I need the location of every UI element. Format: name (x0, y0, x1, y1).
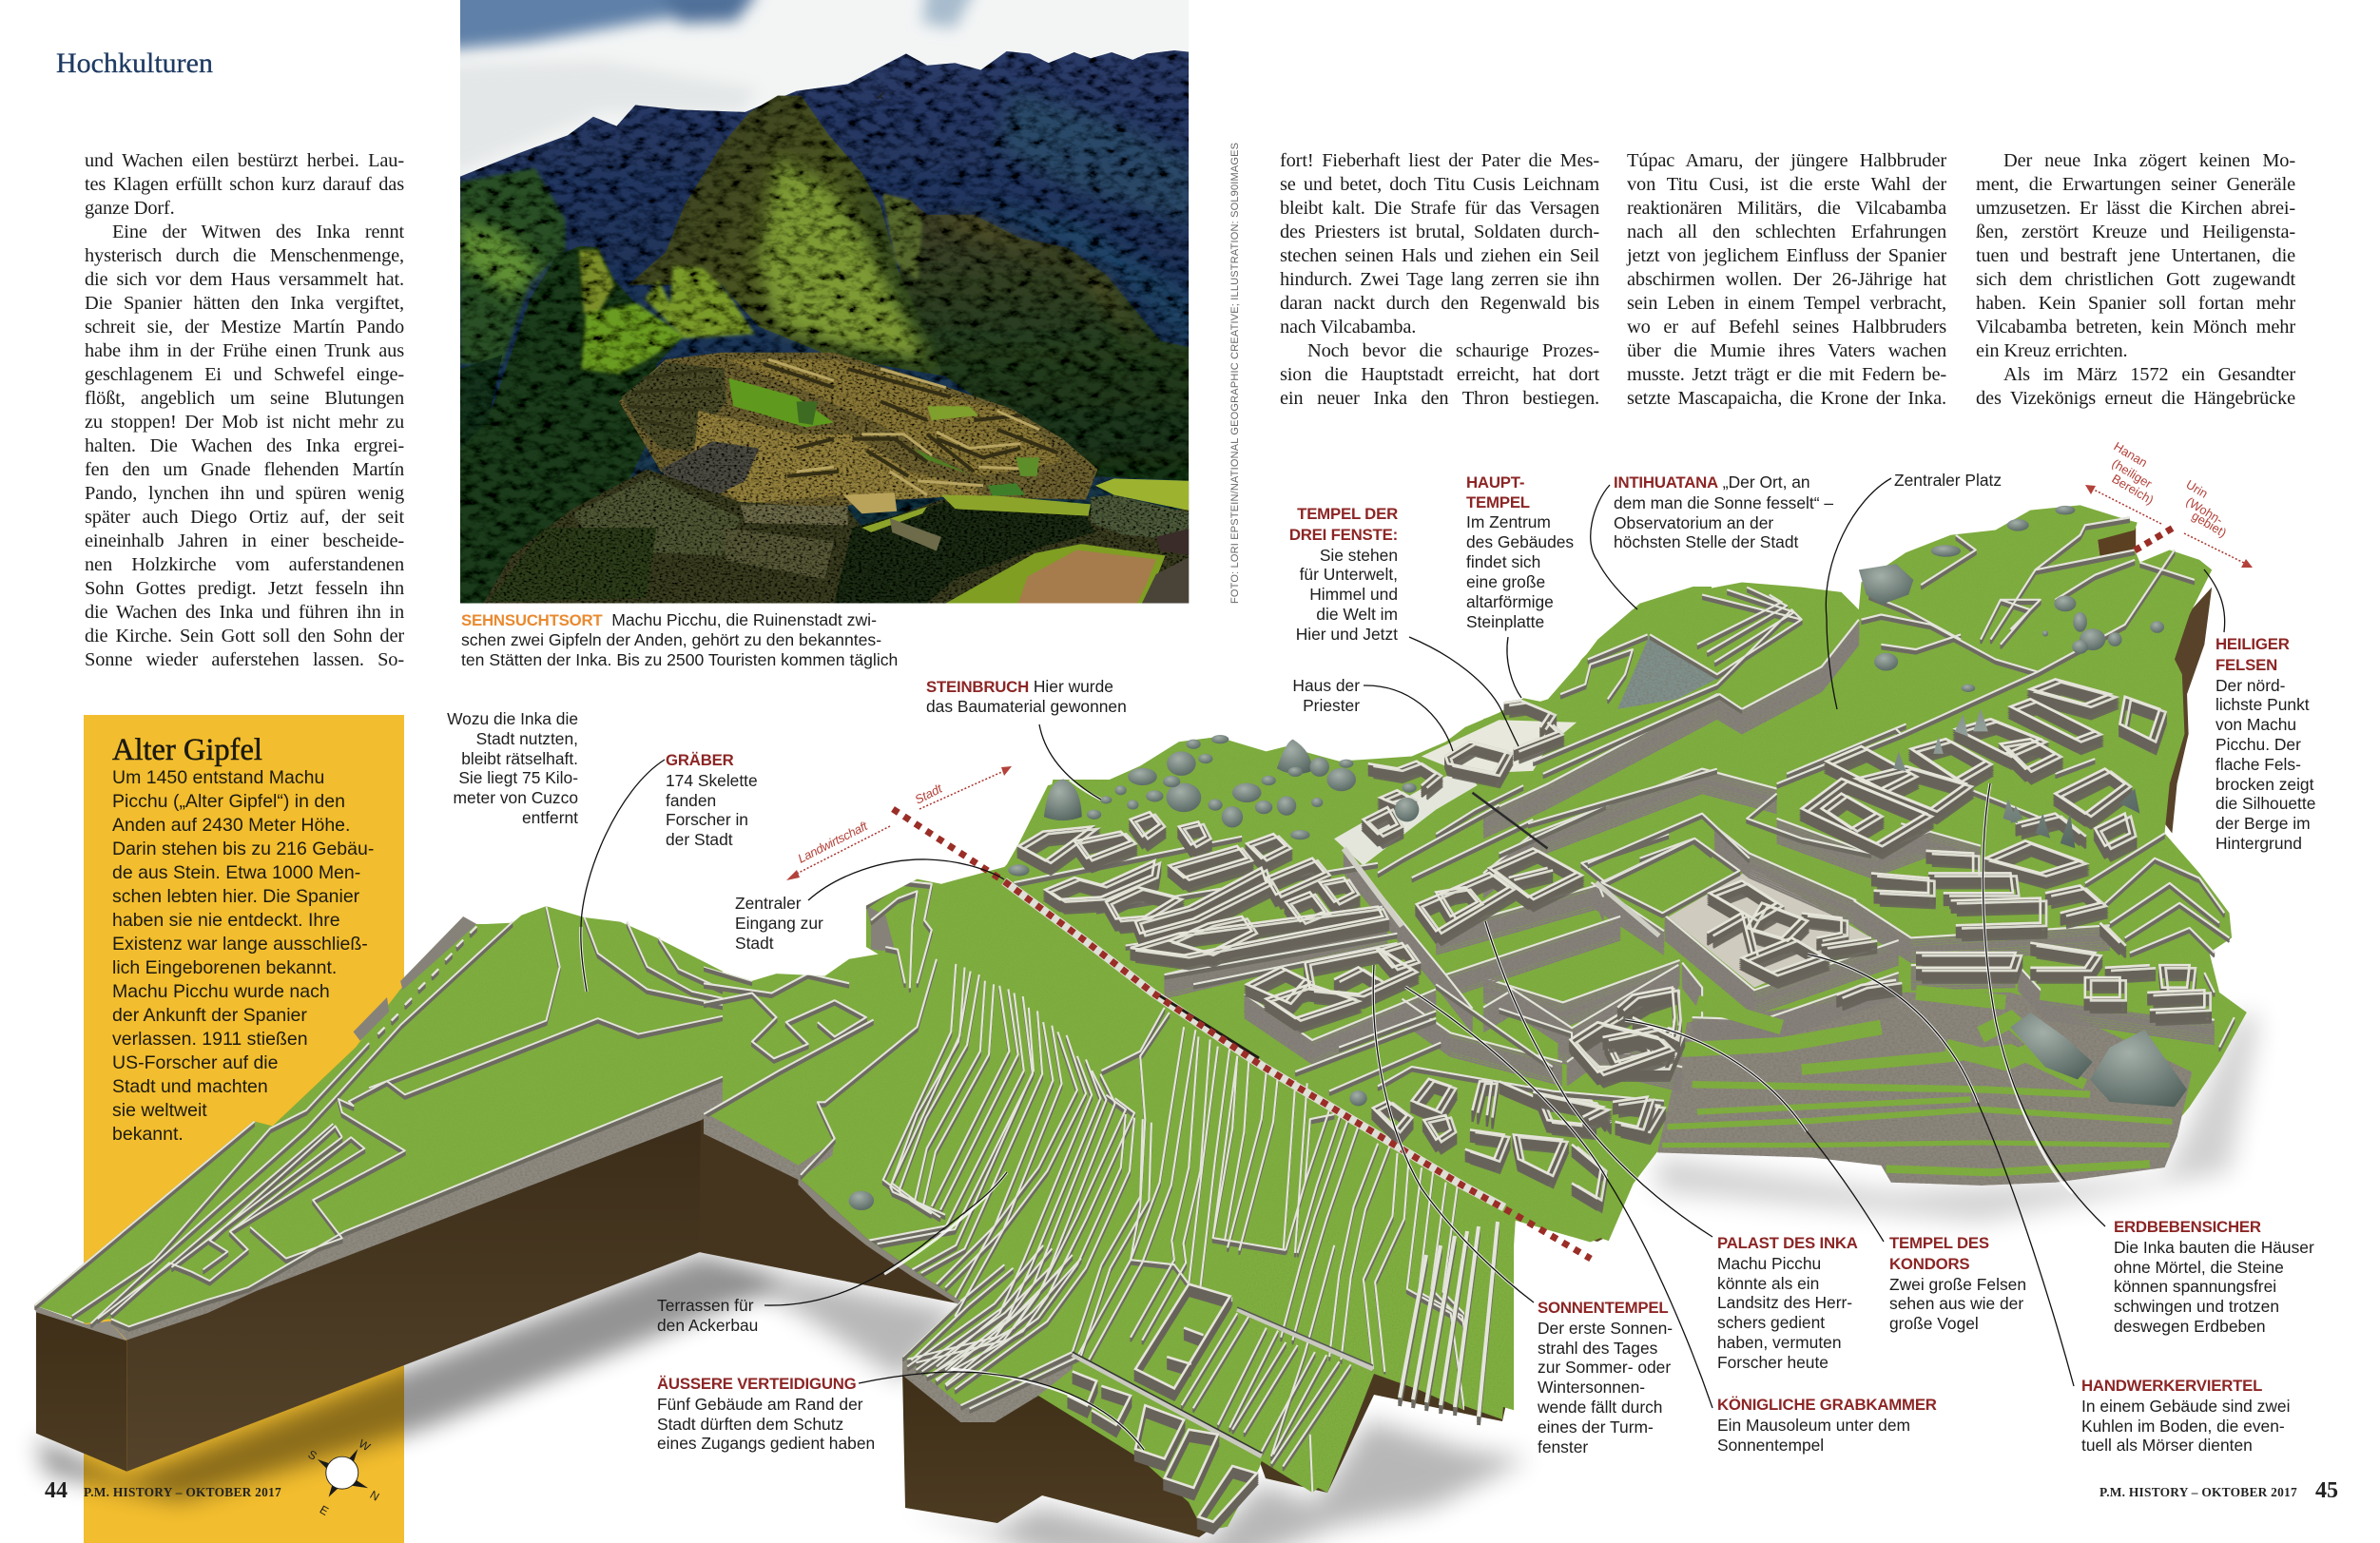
box body text: verlassen. 1911 stießen (112, 1029, 308, 1050)
label: purpose note: Stadt nutzten, (476, 729, 578, 748)
box body text: Darin stehen bis zu 216 Gebäu- (112, 839, 374, 859)
article column 4: tuen und bestraft jene Untertanen, die (1976, 245, 2295, 266)
article column 1: tes Klagen erfüllt schon kurz darauf das (85, 174, 404, 195)
box body text: haben sie nie entdeckt. Ihre (112, 910, 340, 931)
leader: Palast des Inka (1485, 921, 1712, 1237)
box body text: Anden auf 2430 Meter Höhe. (112, 815, 350, 836)
label: Palast des Inka: Landsitz des Herr- (1717, 1293, 1852, 1312)
article column 2 (1280, 150, 1599, 409)
label: Palast des Inka: PALAST DES INKA (1717, 1234, 1858, 1252)
label: Sonnentempel: eines der Turm- (1538, 1418, 1654, 1437)
leader: Haus der Priester (1364, 685, 1453, 751)
label: Steinbruch (926, 677, 1127, 716)
article column 1 (85, 150, 405, 670)
label: Heiliger Felsen: flache Fels- (2216, 755, 2301, 774)
label: Tempel des Kondors: KONDORS (1889, 1255, 1969, 1273)
page number right: 45 (2315, 1478, 2338, 1503)
article column 1: Die Spanier hätten den Inka vergiftet, (85, 293, 404, 314)
label: Tempel der drei Fenster: TEMPEL DER (1297, 505, 1398, 523)
photo caption: schen zwei Gipfeln der Anden, gehört zu den bekanntes- (461, 630, 881, 649)
label: Intihuatana (1614, 473, 1833, 551)
article column 1: und Wachen eilen bestürzt herbei. Lau- (85, 150, 404, 171)
label: Erdbebensicher: Die Inka bauten die Häuser (2114, 1238, 2314, 1257)
article column 3: reaktionären Militärs, die Vilcabamba (1627, 198, 1946, 219)
foreground terraces (484, 470, 1192, 604)
label: Heiliger Felsen: von Machu (2216, 715, 2296, 734)
label: Gräber: GRÄBER (666, 751, 734, 769)
dotted arrows and rotated sector labels: Bereich) (2109, 472, 2157, 508)
article column 4: des Vizekönigs erneut die Hängebrücke (1976, 388, 2295, 409)
article column 2: stechen seinen Hals und ziehen ein Seil (1280, 245, 1599, 266)
label: Intihuatana: INTIHUATANA „Der Ort, an (1614, 473, 1810, 492)
article column 3: jetzt von jeglichem Einfluss der Spanier (1627, 245, 1946, 266)
article column 4 (1976, 150, 2295, 409)
label: Terrassen (657, 1296, 758, 1335)
article column 4: Der neue Inka zögert keinen Mo- (2003, 150, 2295, 171)
label: Zentraler Eingang: Stadt (735, 934, 774, 953)
label: Sonnentempel: strahl des Tages (1538, 1339, 1657, 1358)
article column 3: Túpac Amaru, der jüngere Halbbruder (1627, 150, 1946, 171)
article column 2: Noch bevor die schaurige Prozes- (1307, 340, 1599, 361)
leader: Handwerkerviertel (1808, 955, 2074, 1386)
icon: compass rose: N (368, 1488, 381, 1504)
label: Erdbebensicher: können spannungsfrei (2114, 1277, 2276, 1296)
label: Handwerkerviertel: In einem Gebäude sind zwei (2081, 1397, 2290, 1416)
dotted arrows and rotated sector labels: Urin (2183, 477, 2211, 501)
article column 1: zu stoppen! Der Mob ist nicht mehr zu (85, 412, 404, 433)
label: Königliche Grabkammer: Sonnentempel (1717, 1436, 1824, 1455)
page number left: 44 (45, 1478, 68, 1503)
stone retaining walls (35, 906, 2192, 1422)
article column 2: fort! Fieberhaft liest der Pater die Mes- (1280, 150, 1599, 171)
label: Äussere Verteidigung: ÄUSSERE VERTEIDIGUNG (657, 1375, 857, 1393)
article column 2: se und betet, doch Titu Cusis Leichnam (1280, 174, 1599, 195)
label: Heiliger Felsen: Picchu. Der (2216, 735, 2301, 754)
article column 1: später auch Diego Ortiz auf, der seit (85, 507, 404, 528)
big stone walls extruded from terrace tops (1483, 620, 2215, 1067)
dotted arrows and rotated sector labels: gebiet) (2189, 509, 2229, 540)
label: Tempel des Kondors (1889, 1233, 2026, 1334)
box body text: Machu Picchu wurde nach (112, 981, 330, 1002)
section heading: Hochkulturen (56, 48, 213, 79)
lower terrace strips (1662, 993, 2190, 1172)
article column 4: sich dem christlichen Gott zugewandt (1976, 269, 2295, 290)
label: Sonnentempel: Der erste Sonnen- (1538, 1319, 1673, 1338)
leader: Terrassen (764, 1172, 1007, 1305)
article column 1: Pando, lynchen ihn und spüren wenig (85, 483, 404, 504)
dashed divider: city and farmland (893, 809, 1591, 1259)
article column 3 (1626, 150, 1947, 409)
label: Steinbruch: STEINBRUCH Hier wurde (926, 677, 1113, 696)
label: Heiliger Felsen: brocken zeigt (2216, 775, 2313, 794)
article column 2: bleibt kalt. Die Strafe für das Versagen (1280, 198, 1599, 219)
article column 1: Sonne wieder auferstehen lassen. So- (85, 649, 404, 670)
dotted arrows and rotated sector labels: Hanan (2111, 439, 2150, 470)
article column 1: die Kirche. Sein Gott soll den Sohn der (85, 626, 404, 646)
label: Intihuatana: höchsten Stelle der Stadt (1614, 532, 1798, 551)
box body text (112, 767, 374, 1145)
box body text: de aus Stein. Etwa 1000 Men- (112, 862, 360, 883)
dotted arrows and rotated sector labels (786, 439, 2253, 880)
label: Sonnentempel: wende fällt durch (1538, 1398, 1662, 1417)
label: Heiliger Felsen: lichste Punkt (2216, 695, 2310, 714)
label: Äussere Verteidigung: eines Zugangs gedient haben (657, 1434, 875, 1453)
article column 1: die sich vor dem Haus versammelt hat. (85, 269, 404, 290)
label: Erdbebensicher (2114, 1217, 2314, 1337)
box body text: Um 1450 entstand Machu (112, 767, 324, 788)
article column 1: geschlagenem Ei und Schwefel einge- (85, 364, 404, 385)
leader: Tempel der drei Fenster (1409, 637, 1519, 746)
label: Terrassen: den Ackerbau (657, 1316, 758, 1335)
article column 3: sein Leben in einem Tempel verbracht, (1627, 293, 1946, 314)
label: Königliche Grabkammer (1717, 1395, 1937, 1455)
label: Gräber: der Stadt (666, 830, 733, 849)
label: purpose note: meter von Cuzco (454, 788, 578, 807)
article column 1: halten. Die Wachen des Inka ergrei- (85, 435, 404, 456)
box body text: der Ankunft der Spanier (112, 1005, 307, 1026)
label: Erdbebensicher: ohne Mörtel, die Steine (2114, 1258, 2284, 1277)
label: Haupttempel: altarförmige (1466, 592, 1554, 611)
article column 1: eineinhalb Jahren in einer bescheide- (85, 530, 404, 551)
label: Heiliger Felsen: HEILIGER (2216, 635, 2290, 653)
leader: Gräber (581, 760, 665, 992)
label: Tempel des Kondors: Zwei große Felsen (1889, 1275, 2026, 1294)
box body text: Existenz war lange ausschließ- (112, 934, 368, 955)
label: Palast des Inka: Machu Picchu (1717, 1254, 1821, 1273)
label: Haupttempel: Im Zentrum (1466, 512, 1551, 531)
leader lines from captions to the model (581, 478, 2225, 1450)
label: Palast des Inka: könnte als ein (1717, 1274, 1819, 1293)
label: Sonnentempel: Wintersonnen- (1538, 1378, 1645, 1397)
label: Tempel des Kondors: sehen aus wie der (1889, 1294, 2023, 1313)
box body text: bekannt. (112, 1124, 184, 1145)
label: Zentraler Eingang: Eingang zur (735, 914, 823, 933)
label: Äussere Verteidigung: Stadt dürften dem Schutz (657, 1415, 843, 1434)
label: Tempel der drei Fenster: DREI FENSTE: (1289, 526, 1398, 544)
article column 4: umzusetzen. Er lässt die Kirchen abrei- (1976, 198, 2295, 219)
label: Tempel der drei Fenster: für Unterwelt, (1300, 565, 1398, 584)
earth faces (36, 528, 2212, 1537)
article column 3: setzte Mascapaicha, die Krone der Inka. (1627, 388, 1946, 409)
label: Sonnentempel: fenster (1538, 1437, 1588, 1456)
article column 1: nen Holzkirche vom auferstandenen (85, 554, 404, 575)
article column 1: schreit sie, der Mestize Martín Pando (85, 317, 404, 338)
label: Zentraler Platz: Zentraler Platz (1894, 471, 2002, 490)
article column 2: nach Vilcabamba. (1280, 317, 1416, 338)
leader: Königliche Grabkammer (1405, 987, 1712, 1408)
article column 3: wo er auf Befehl seines Halbbruders (1627, 317, 1946, 338)
photo caption (461, 610, 898, 669)
leader: Äussere Verteidigung (859, 1369, 1144, 1450)
label: Haupttempel (1466, 473, 1574, 631)
label: Tempel der drei Fenster: Hier und Jetzt (1296, 625, 1398, 644)
label: purpose note: Wozu die Inka die (447, 709, 578, 728)
dashed divider: Hanan and Urin (2135, 526, 2177, 550)
box body text: Picchu („Alter Gipfel“) in den (112, 791, 345, 812)
label: Haus der Priester: Haus der (1292, 676, 1360, 695)
leader: Heiliger Felsen (2204, 569, 2225, 632)
label: Handwerkerviertel: tuell als Mörser dienten (2081, 1436, 2253, 1455)
buildings: stone wall outlines (378, 679, 2211, 1522)
roads along the central dividing line (1004, 793, 1659, 1456)
label: Tempel des Kondors: TEMPEL DES (1889, 1234, 1989, 1252)
article column 4: ein Kreuz errichten. (1976, 340, 2127, 361)
article column 1: flößt, angeblich um seine Blutungen (85, 388, 404, 409)
label: Palast des Inka: schers gedient (1717, 1313, 1825, 1332)
grass surface (35, 505, 2247, 1532)
article column 2: ein neuer Inka den Thron bestiegen. (1280, 388, 1599, 409)
label: Terrassen: Terrassen für (657, 1296, 753, 1315)
leader: Steinbruch (1039, 724, 1101, 800)
dotted arrows and rotated sector labels: Stadt (913, 781, 945, 807)
label: Haus der Priester: Priester (1303, 696, 1360, 715)
article column 2: hindurch. Zwei Tage lang zerren sie ihn (1280, 269, 1599, 290)
label: Haupttempel: eine große (1466, 572, 1545, 591)
leader: Sonnentempel (1373, 965, 1534, 1302)
article column 2: des Priesters ist brutal, Soldaten durch- (1280, 222, 1599, 242)
dotted arrows and rotated sector labels: (heiliger (2109, 456, 2155, 492)
article column 2: sion die Hauptstadt erreicht, hat dort (1280, 364, 1599, 385)
article column 4: haben. Kein Spanier soll fortan mehr (1976, 293, 2295, 314)
photo caption: SEHNSUCHTSORT Machu Picchu, die Ruinenstadt zwi- (461, 610, 877, 629)
leader: Haupttempel (1507, 637, 1521, 698)
label: Heiliger Felsen: FELSEN (2216, 656, 2277, 674)
box heading: Alter Gipfel (112, 733, 262, 767)
label: Palast des Inka: haben, vermuten (1717, 1333, 1842, 1352)
label: Tempel des Kondors: große Vogel (1889, 1314, 1979, 1333)
box body text: sie weltweit (112, 1100, 207, 1121)
icon: compass rose: W (357, 1437, 373, 1454)
ruins city on the ridge (619, 353, 1097, 509)
label: Steinbruch: das Baumaterial gewonnen (926, 697, 1127, 716)
label: Haupttempel: Steinplatte (1466, 612, 1544, 631)
label: Heiliger Felsen: die Silhouette (2216, 794, 2315, 813)
article column 4: ment, die Erwartungen seiner Generäle (1976, 174, 2295, 195)
dotted arrows and rotated sector labels: Landwirtschaft (796, 818, 871, 866)
plaza and rock surfaces (1334, 634, 1871, 988)
label: Heiliger Felsen (2216, 635, 2315, 853)
article column 3: nach all den schlechten Erfahrungen (1627, 222, 1946, 242)
label: Tempel der drei Fenster: Himmel und (1309, 585, 1398, 604)
label: Zentraler Eingang (735, 894, 823, 953)
shadow under terrain model (36, 1013, 2259, 1543)
label: Haupttempel: HAUPT- (1466, 473, 1524, 492)
label: Haupttempel: TEMPEL (1466, 493, 1530, 511)
label: Äussere Verteidigung: Fünf Gebäude am Rand der (657, 1395, 863, 1414)
label: Palast des Inka (1717, 1233, 1858, 1373)
article column 4: ßen, zerstört Kreuze und Heiligensta- (1976, 222, 2295, 242)
photo: Machu Picchu ruins between two peaks (433, 0, 1192, 604)
label: Zentraler Eingang: Zentraler (735, 894, 802, 913)
icon: compass rose: S (305, 1448, 319, 1463)
label: Heiliger Felsen: der Berge im (2216, 814, 2311, 833)
label: Haupttempel: findet sich (1466, 552, 1540, 571)
article column 4: Vilcabamba betreten, kein Mönch mehr (1976, 317, 2295, 338)
label: Tempel der drei Fenster: die Welt im (1316, 605, 1398, 624)
label: Intihuatana: Observatorium an der (1614, 513, 1773, 532)
article column 3: abschirmen wollen. Der 26-Jährige hat (1627, 269, 1946, 290)
panel: yellow info box background (84, 715, 404, 1543)
box body text: lich Eingeborenen bekannt. (112, 957, 337, 978)
label: Äussere Verteidigung (657, 1375, 875, 1453)
article column 3: musste. Jetzt trägt er die mit Federn be- (1627, 364, 1946, 385)
article column 2: daran nackt durch den Regenwald bis (1280, 293, 1599, 314)
label: Gräber: 174 Skelette (666, 771, 758, 790)
label: Erdbebensicher: deswegen Erdbeben (2114, 1317, 2266, 1336)
label: Erdbebensicher: ERDBEBENSICHER (2114, 1218, 2261, 1236)
label: Sonnentempel (1538, 1299, 1673, 1456)
leader: Zentraler Eingang (808, 859, 1004, 900)
article column 1: ganze Dorf. (85, 198, 175, 219)
leader: Erdbebensicher (1983, 783, 2105, 1226)
leader: Zentraler Platz (1826, 478, 1891, 709)
article column 1: die Wachen des Inka und führen ihn in (85, 602, 404, 623)
label: Tempel der drei Fenster: Sie stehen (1320, 546, 1398, 565)
folio right: P.M. HISTORY – OKTOBER 2017 (2099, 1485, 2297, 1499)
label: Palast des Inka: Forscher heute (1717, 1353, 1829, 1372)
article column 1: hysterisch durch die Menschenmenge, (85, 245, 404, 266)
label: Erdbebensicher: schwingen und trotzen (2114, 1297, 2279, 1316)
vertical photo credit: FOTO: LORI EPSTEIN/NATIONAL GEOGRAPHIC CREATIVE; ILLUSTRATION: SOL90IMAGES (1229, 143, 1241, 604)
box body text: Stadt und machten (112, 1076, 268, 1097)
article column 1: fen den um Gnade flehenden Martín (85, 459, 404, 480)
icon: compass rose (305, 1437, 381, 1518)
label: Haus der Priester (1292, 676, 1360, 715)
box body text: schen lebten hier. Die Spanier (112, 886, 359, 907)
label: purpose note: entfernt (522, 808, 578, 827)
terrain model of Machu Picchu (35, 505, 2247, 1537)
label: Handwerkerviertel: HANDWERKERVIERTEL (2081, 1377, 2262, 1395)
label: Tempel der drei Fenster (1289, 505, 1398, 644)
label: Gräber: fanden (666, 791, 716, 810)
leader: Tempel des Kondors (1625, 1020, 1884, 1242)
label: purpose note: Sie liegt 75 Kilo- (458, 768, 578, 787)
label: purpose note (447, 709, 578, 827)
distant mountains and peaks (460, 50, 1192, 604)
label: purpose note: bleibt rätselhaft. (461, 749, 578, 768)
label: Haupttempel: des Gebäudes (1466, 532, 1574, 551)
label: Handwerkerviertel (2081, 1376, 2290, 1456)
label: Heiliger Felsen: Der nörd- (2216, 676, 2285, 695)
label: Königliche Grabkammer: Ein Mausoleum unter dem (1717, 1416, 1910, 1435)
label: Intihuatana: dem man die Sonne fesselt“ – (1614, 493, 1833, 512)
label: Königliche Grabkammer: KÖNIGLICHE GRABKAMMER (1717, 1396, 1937, 1414)
terrace contour lines (35, 517, 2235, 1493)
dotted arrows and rotated sector labels: (Wohn- (2183, 494, 2226, 527)
label: Heiliger Felsen: Hintergrund (2216, 834, 2302, 853)
box: Alter Gipfel (112, 733, 374, 1145)
label: Sonnentempel: SONNENTEMPEL (1538, 1299, 1668, 1317)
leader: Intihuatana (1591, 485, 1637, 609)
article column 3: über die Mumie ihres Vaters wachen (1627, 340, 1946, 361)
label: Gräber: Forscher in (666, 810, 748, 829)
article column 1: habe ihm in der Frühe einen Trunk aus (85, 340, 404, 361)
label: Sonnentempel: zur Sommer- oder (1538, 1358, 1671, 1377)
box body text: US-Forscher auf die (112, 1052, 278, 1073)
boulders of the quarry and rocks (849, 506, 2187, 1210)
article column 1: Sohn Gottes predigt. Jetzt fesseln ihn (85, 578, 404, 599)
icon: compass rose: E (318, 1503, 331, 1518)
label: Handwerkerviertel: Kuhlen im Boden, die even- (2081, 1417, 2285, 1436)
folio left: P.M. HISTORY – OKTOBER 2017 (84, 1485, 281, 1499)
article column 1: Eine der Witwen des Inka rennt (112, 222, 404, 242)
photo caption: ten Stätten der Inka. Bis zu 2500 Touristen kommen täglich (461, 650, 898, 669)
label: Gräber (666, 751, 758, 849)
article column 4: Als im März 1572 ein Gesandter (2003, 364, 2295, 385)
article column 3: von Titu Cusi, ist die erste Wahl der (1627, 174, 1946, 195)
